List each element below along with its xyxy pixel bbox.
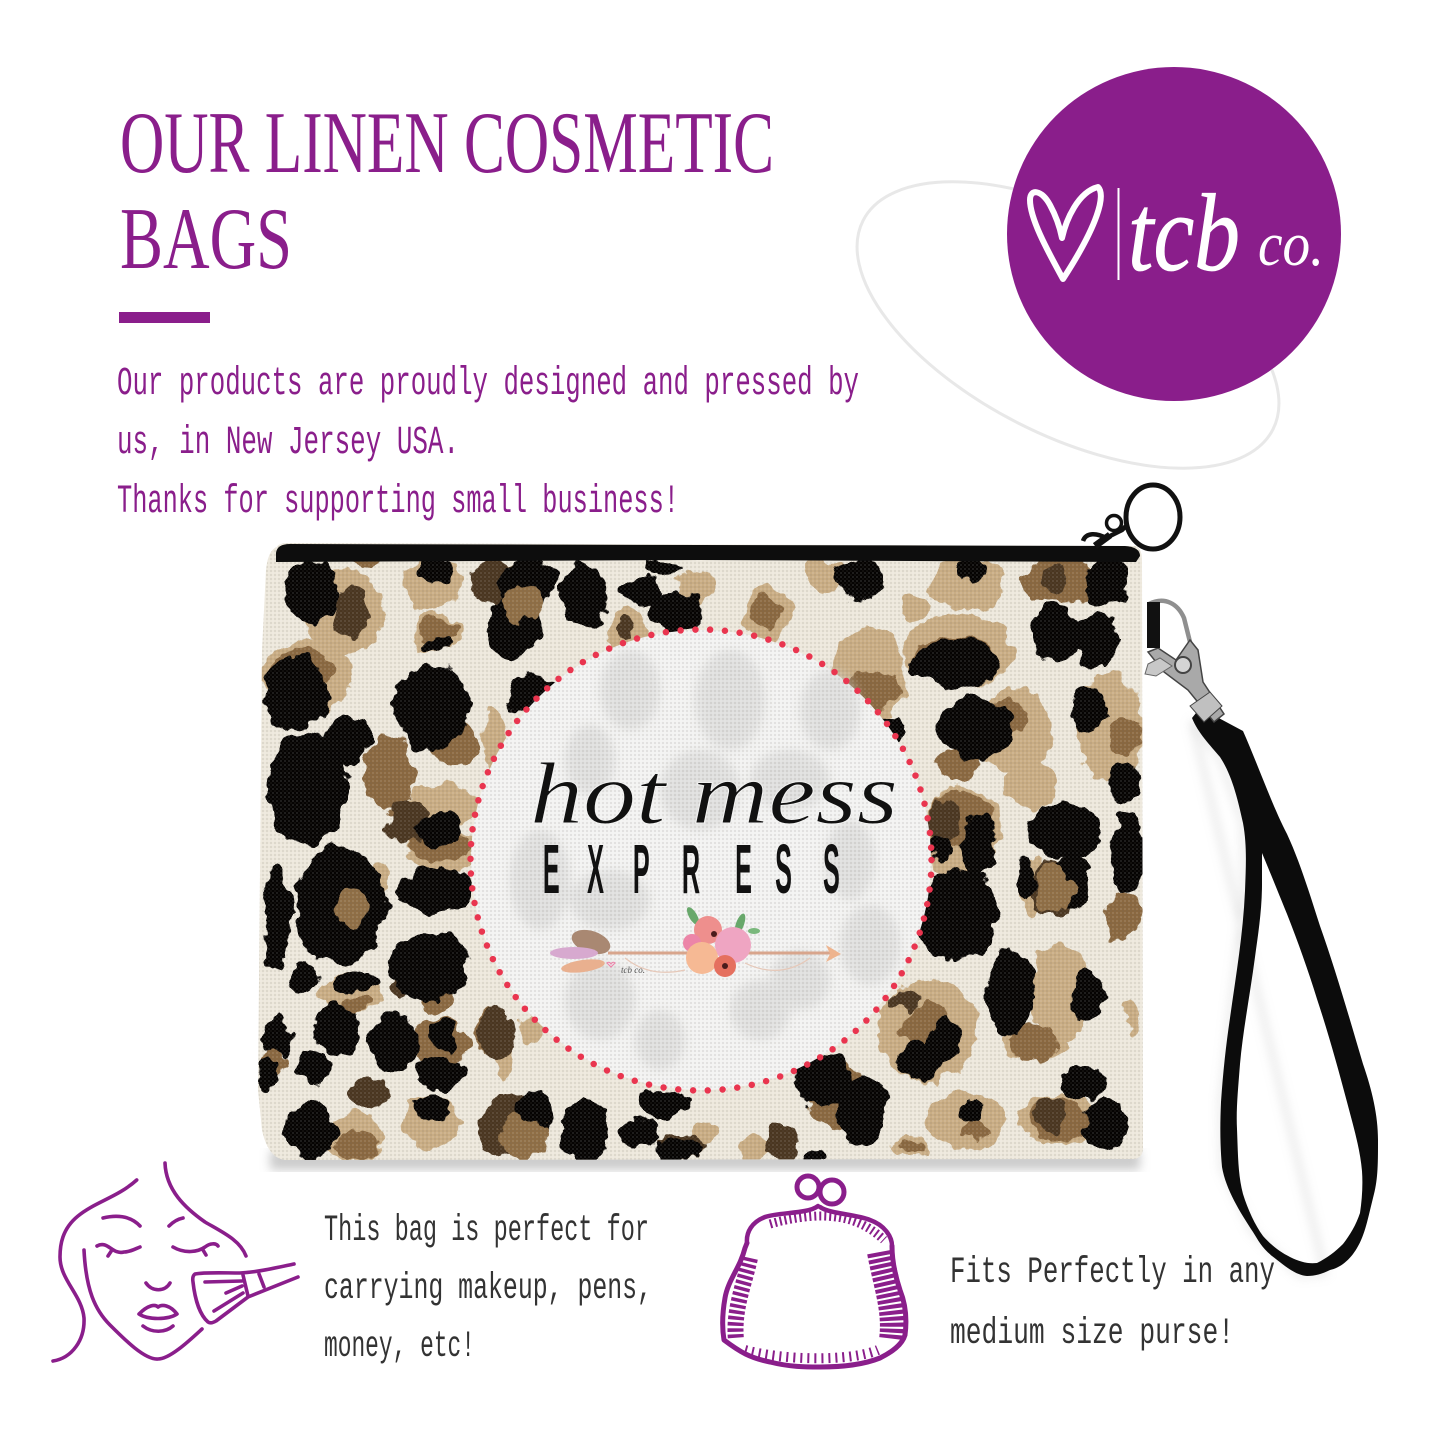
dotted red ring (470, 630, 932, 1090)
text: bag uses: carrying makeup, pens, (324, 1268, 652, 1310)
text: bag uses (324, 1210, 652, 1368)
floral arrow (550, 905, 841, 977)
express heading: EXPRESS (543, 830, 840, 909)
title: OUR LINEN COSMETIC (120, 95, 774, 192)
text: purse fit (950, 1252, 1275, 1355)
icon: coin purse (723, 1176, 906, 1367)
leopard spots (257, 557, 1144, 1162)
lobster clasp (1145, 601, 1224, 722)
panel: leopard linen bag (250, 535, 1150, 1170)
linen weave texture (250, 535, 1150, 1170)
title underline (119, 312, 210, 323)
wrist strap (1192, 708, 1378, 1276)
logo badge (1007, 67, 1341, 401)
title: BAGS (120, 191, 292, 288)
intro text: Thanks for supporting small business! (117, 480, 679, 525)
intro text: us, in New Jersey USA. (117, 421, 459, 466)
logo badge: co. (1258, 211, 1324, 279)
hot mess express artwork (530, 746, 898, 977)
text: bag uses: money, etc! (324, 1326, 475, 1368)
text: bag uses: This bag is perfect for (324, 1210, 649, 1252)
icon: face with makeup brush (53, 1163, 298, 1361)
decorative orbit ellipse (813, 123, 1323, 527)
logo badge: tcb (1128, 172, 1240, 294)
intro text: Our products are proudly designed and pressed by (117, 362, 859, 407)
printed circle (471, 630, 931, 1090)
bag fabric (250, 535, 1150, 1170)
faded spots inside circle (510, 650, 900, 1070)
text: purse fit: Fits Perfectly in any (950, 1252, 1275, 1294)
text: purse fit: medium size purse! (950, 1313, 1234, 1355)
key ring and zipper pull (1083, 485, 1180, 549)
intro text (117, 362, 859, 525)
bag shadow (270, 1150, 1140, 1170)
zipper (276, 544, 1140, 562)
floral arrow: tcb co. (621, 965, 645, 975)
title (120, 95, 774, 288)
script heading: hot mess (530, 746, 898, 843)
